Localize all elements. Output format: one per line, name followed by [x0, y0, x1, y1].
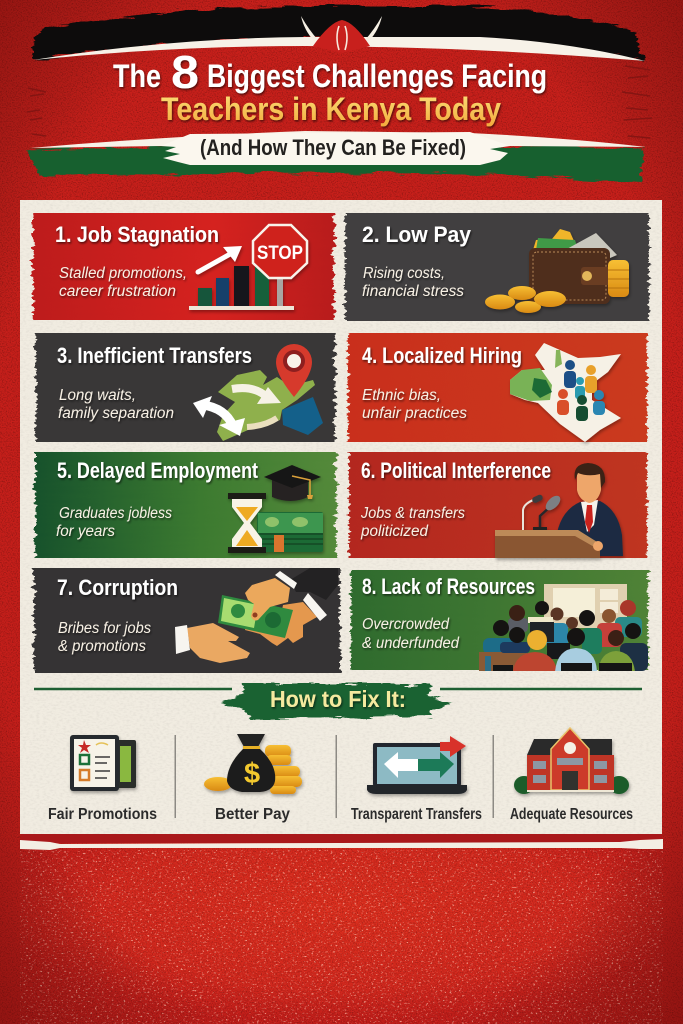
- title: The: [113, 58, 161, 94]
- lower white stripe: [30, 131, 646, 148]
- title 3: 3. Inefficient Transfers: [57, 343, 252, 368]
- panel bottom stripes: [21, 834, 662, 843]
- icon: bar chart with stop sign: STOP: [257, 243, 303, 264]
- banner: how to fix it: [220, 684, 453, 719]
- fix 3: transparent transfers: [351, 736, 482, 823]
- description 4: unfair practices: [362, 405, 467, 422]
- title 6: 6. Political Interference: [361, 458, 551, 483]
- icon: school building: [514, 728, 629, 794]
- description 2: Rising costs,: [363, 265, 445, 282]
- title: 8: [171, 46, 199, 98]
- description 2: financial stress: [362, 283, 464, 300]
- how to fix it section: [34, 684, 642, 823]
- card 4: localized hiring: [348, 333, 647, 442]
- card 3: inefficient transfers: [36, 333, 335, 442]
- label: Transparent Transfers: [351, 806, 482, 823]
- description 7: & promotions: [58, 638, 146, 655]
- description 7: Bribes for jobs: [58, 620, 151, 637]
- white stripe: [33, 37, 645, 61]
- description 6: Jobs & transfers: [360, 505, 465, 522]
- title 5: 5. Delayed Employment: [57, 458, 259, 483]
- icon: crowded classroom: [479, 584, 648, 672]
- icon: wallet and coins: [485, 229, 629, 313]
- fix 1: fair promotions: [48, 735, 157, 823]
- black brush stripe: [33, 6, 645, 60]
- title 7: 7. Corruption: [57, 575, 178, 600]
- banner: how to fix it: How to Fix It:: [270, 686, 406, 712]
- title: [113, 46, 547, 127]
- icon: money bag and coins: $: [244, 758, 260, 790]
- description 8: [362, 616, 460, 652]
- card 2: low pay: [345, 213, 649, 321]
- card 8: lack of resources: [351, 570, 648, 672]
- description 3: family separation: [58, 405, 174, 422]
- icon: graduation cap, hourglass and money: [228, 465, 323, 553]
- shield with spears: [301, 16, 382, 53]
- divider: [174, 735, 176, 818]
- label: Better Pay: [215, 806, 290, 823]
- header banner: [26, 6, 652, 183]
- description 5: [56, 505, 172, 540]
- description 8: & underfunded: [362, 635, 460, 652]
- title 8: 8. Lack of Resources: [362, 574, 535, 599]
- section rule lines: [34, 688, 642, 690]
- description 4: [362, 387, 467, 422]
- description 3: Long waits,: [59, 387, 136, 404]
- title 2: 2. Low Pay: [362, 222, 472, 247]
- main cream panel: [20, 200, 663, 850]
- icon: Kenya map with people: [510, 343, 621, 442]
- icon: speaker at podium: [495, 463, 623, 558]
- description 2: [362, 265, 464, 300]
- icon: bar chart with stop sign: [189, 225, 307, 310]
- subtitle white patch: [161, 132, 510, 165]
- label: Fair Promotions: [48, 806, 157, 823]
- description 1: [59, 265, 187, 300]
- subtitle: (And How They Can Be Fixed): [200, 135, 466, 160]
- fix 4: adequate resources: [510, 728, 633, 823]
- card 1: job stagnation: [33, 213, 334, 320]
- title: Teachers in Kenya Today: [161, 91, 501, 127]
- card 7: corruption: [34, 568, 340, 673]
- description 7: [58, 620, 151, 655]
- card 5: delayed employment: [35, 452, 336, 558]
- description 6: politicized: [360, 523, 429, 540]
- icon: laptop with arrows: [367, 736, 467, 794]
- description 1: career frustration: [59, 283, 176, 300]
- description 5: for years: [56, 523, 115, 540]
- label: Adequate Resources: [510, 806, 633, 823]
- card 6: political interference: [349, 452, 647, 558]
- icon: handshake bribe: [175, 568, 338, 663]
- title 1: 1. Job Stagnation: [55, 222, 219, 247]
- icon: checklist document: [70, 735, 136, 791]
- divider: [336, 735, 337, 818]
- title: Biggest Challenges Facing: [207, 58, 547, 94]
- description 5: Graduates jobless: [59, 505, 172, 522]
- green brush stripe: [26, 144, 644, 183]
- side brush marks: [27, 66, 652, 138]
- icon: map, pin and arrows: [193, 344, 323, 441]
- description 4: Ethnic bias,: [362, 387, 441, 404]
- divider: [492, 735, 494, 818]
- title 4: 4. Localized Hiring: [362, 343, 522, 368]
- description 8: Overcrowded: [362, 616, 450, 633]
- description 3: [58, 387, 174, 422]
- description 1: Stalled promotions,: [59, 265, 187, 282]
- fix 2: better pay: [204, 734, 302, 823]
- description 6: [360, 505, 465, 540]
